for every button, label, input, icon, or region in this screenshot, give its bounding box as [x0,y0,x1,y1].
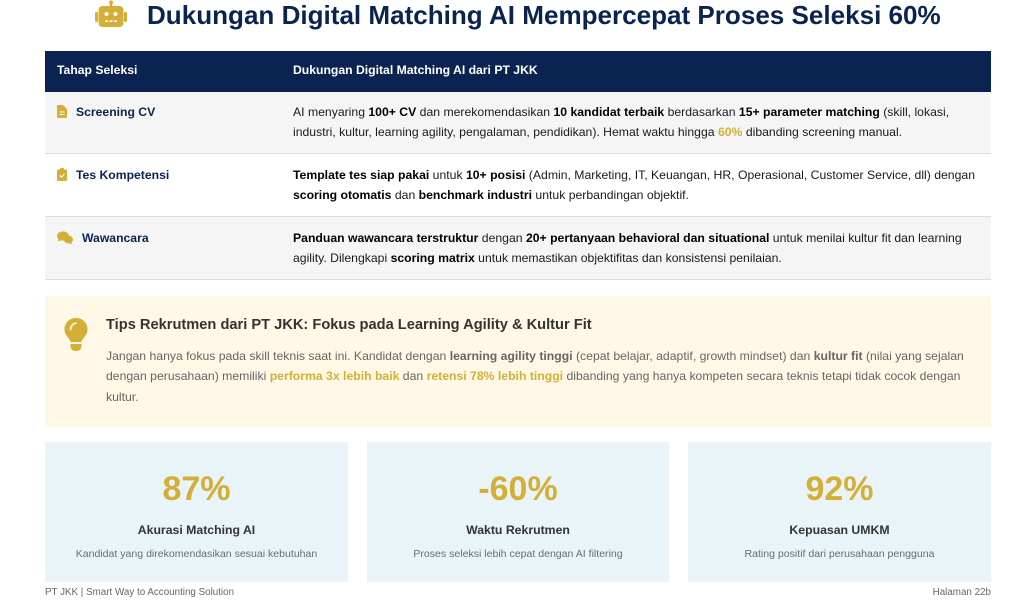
table header [45,51,991,92]
tips body: kultur. [106,390,139,404]
footer left: PT JKK | Smart Way to Accounting Solution [45,587,234,598]
stat card: akurasi [45,442,348,582]
stat card: kepuasan [688,442,991,582]
stat description: Kandidat yang direkomendasikan sesuai kebutuhan [76,548,317,560]
stat description: Proses seleksi lebih cepat dengan AI filtering [413,548,623,560]
icon: clipboard check [57,168,67,181]
tips body [106,348,964,404]
text: wawancara: Panduan wawancara terstruktur dengan 20+ pertanyaan behavioral dan situational untuk menilai kultur fit dan learning [293,231,962,245]
icon: light bulb [64,318,88,351]
stat title: Kepuasan UMKM [789,523,890,537]
table: selection stages [45,51,991,92]
row: wawancara [45,217,991,280]
tips body: dengan perusahaan) memiliki performa 3x lebih baik dan retensi 78% lebih tinggi dibanding yang hanya kompeten secara teknis tetapi tidak cocok dengan [106,369,960,383]
text: screening CV: industri, kultur, learning agility, pengalaman, pendidikan). Hemat waktu hingga 60% dibanding screening manual. [293,125,902,139]
stat description: Rating positif dari perusahaan pengguna [744,548,934,560]
text: wawancara [293,231,962,265]
text: wawancara: agility. Dilengkapi scoring matrix untuk memastikan objektifitas dan konsistensi penilaian. [293,251,782,265]
text: screening CV: AI menyaring 100+ CV dan merekomendasikan 10 kandidat terbaik berdasarkan 15+ parameter matching (skill, lokasi, [293,105,949,119]
label: tes kompetensi: Tes Kompetensi [76,168,169,182]
footer right: Halaman 22b [933,587,991,598]
tips body: Jangan hanya fokus pada skill teknis saat ini. Kandidat dengan learning agility tinggi (cepat belajar, adaptif, growth mindset) dan kultur fit (nilai yang sejalan [106,348,964,362]
stat value: -60% [478,470,558,508]
icon: document [57,105,67,118]
row: tes kompetensi [45,154,991,217]
text: tes kompetensi: scoring otomatis dan benchmark industri untuk perbandingan objektif. [293,188,689,202]
text: tes kompetensi: Template tes siap pakai untuk 10+ posisi (Admin, Marketing, IT, Keuangan, HR, Operasional, Customer Service, dll) dengan [293,168,975,182]
icon: chat bubbles [57,231,73,244]
stat title: Waktu Rekrutmen [466,523,570,537]
text: screening CV [293,105,949,139]
panel: tips [45,296,991,427]
tips heading: Tips Rekrutmen dari PT JKK: Fokus pada Learning Agility & Kultur Fit [106,317,592,333]
icon: robot [95,0,127,27]
stat value: 92% [805,470,874,508]
header: stage: Tahap Seleksi [57,63,137,77]
header: support: Dukungan Digital Matching AI dari PT JKK [293,63,538,77]
stat card: waktu [367,442,669,582]
row: screening CV [45,92,991,154]
stat value: 87% [162,470,231,508]
label: wawancara: Wawancara [82,231,149,245]
text: tes kompetensi [293,168,975,202]
label: screening CV: Screening CV [76,105,155,119]
title [95,0,941,30]
title text: Dukungan Digital Matching AI Mempercepat Proses Seleksi 60% [147,0,941,30]
stat title: Akurasi Matching AI [138,523,255,537]
